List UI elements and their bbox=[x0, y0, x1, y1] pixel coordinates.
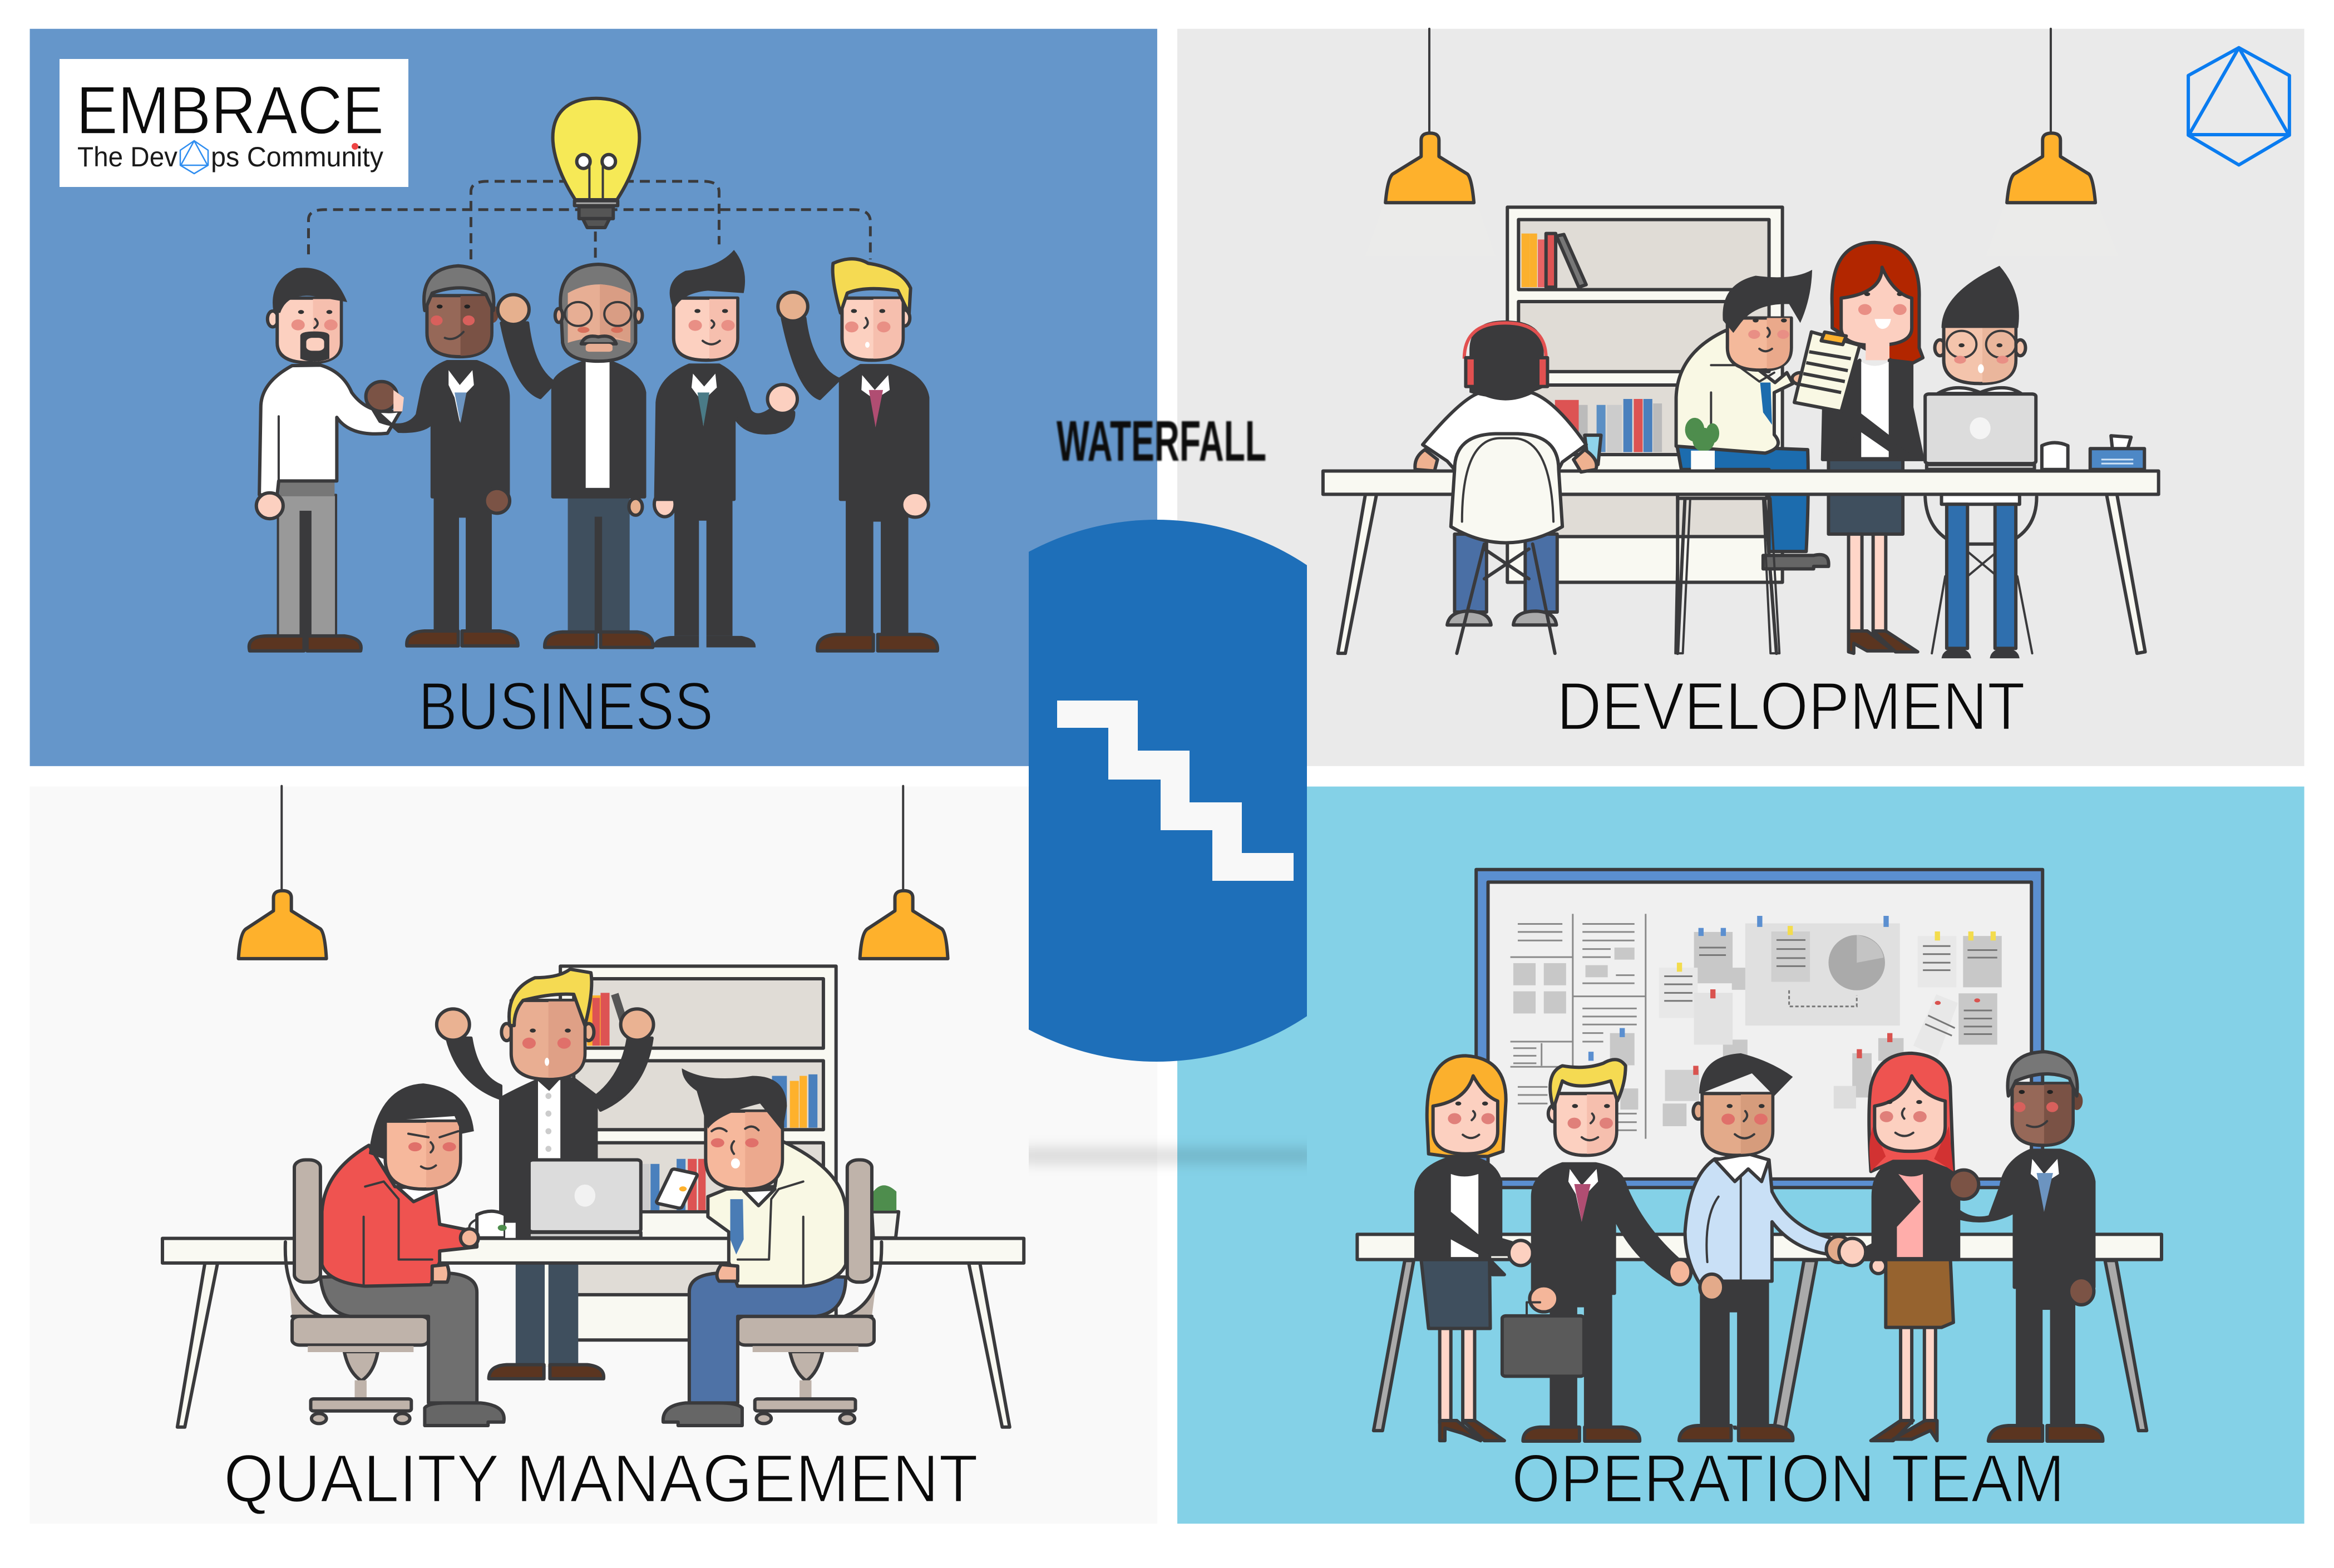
person: blonde woman in skirt bbox=[1416, 1056, 1533, 1441]
label: development: DEVELOPMENT bbox=[1557, 668, 2025, 744]
person: man in cream shirt with chair bbox=[656, 1068, 881, 1426]
label: operation team: OPERATION TEAM bbox=[1512, 1441, 2065, 1516]
icon: pendant lamp left bbox=[1365, 29, 1496, 256]
chart card bbox=[1745, 924, 1900, 1025]
plant: cactus bbox=[872, 1185, 899, 1238]
person: back view with headphones bbox=[1415, 320, 1597, 653]
icon: pendant lamp right bbox=[860, 786, 948, 959]
central waterfall badge bbox=[1029, 520, 1307, 1167]
icon: pendant lamp left bbox=[239, 786, 327, 959]
person: man with clipboard bbox=[1676, 270, 1829, 653]
laptop bbox=[529, 1160, 641, 1238]
panel: development bbox=[1177, 29, 2305, 766]
icon: inline logo hexagon bbox=[180, 141, 208, 174]
logo tagline end: ps Community bbox=[211, 141, 383, 172]
person: standing blond man with raised arms bbox=[437, 969, 654, 1379]
icon: white staircase bbox=[1057, 701, 1294, 881]
icon: pendant lamp right bbox=[1986, 29, 2119, 256]
whiteboard text columns bbox=[1511, 914, 1646, 1139]
person: white shirt man bbox=[249, 268, 401, 651]
label: quality management: QUALITY MANAGEMENT bbox=[224, 1441, 978, 1516]
paper notes bbox=[1659, 936, 1958, 1057]
person: red haired woman bbox=[1823, 243, 1923, 653]
label: business: BUSINESS bbox=[418, 668, 713, 744]
person: bearded man with glasses bbox=[498, 264, 653, 647]
desk bbox=[162, 1239, 1024, 1427]
bookshelf bbox=[1507, 207, 1783, 582]
logo tagline start: The Dev bbox=[77, 141, 177, 172]
mug bbox=[469, 1211, 516, 1238]
person: blond man in suit bbox=[778, 259, 937, 651]
person: man in red sweater with chair bbox=[285, 1083, 504, 1426]
tissue box bbox=[2090, 436, 2144, 470]
person: dark skinned man, handshake bbox=[1949, 1052, 2103, 1441]
person: man in light blue shirt bbox=[1679, 1053, 1852, 1441]
panel: business bbox=[30, 29, 1157, 766]
sticky notes bbox=[1513, 931, 2002, 1126]
icon: connecting dashed lines bbox=[308, 181, 870, 261]
desk bbox=[1357, 1234, 2162, 1431]
blue clipped circle bbox=[1029, 520, 1307, 1062]
person: red haired woman bbox=[1839, 1053, 1958, 1441]
document: clipboard bbox=[1794, 332, 1860, 411]
heading: waterfall: WATERFALL bbox=[1057, 409, 1266, 473]
panel: quality management bbox=[30, 786, 1157, 1523]
bookshelf bbox=[560, 966, 836, 1340]
desk bbox=[1323, 471, 2159, 653]
icon: red dot bbox=[352, 143, 358, 150]
laptop bbox=[1925, 394, 2036, 470]
mug bbox=[2042, 443, 2068, 470]
shadow under badge bbox=[1001, 1148, 1335, 1163]
glass of water bbox=[1585, 435, 1601, 465]
person: blond man with briefcase bbox=[1502, 1059, 1691, 1441]
person: black haired man in suit bbox=[653, 250, 797, 647]
whiteboard bbox=[1476, 870, 2042, 1187]
icon: light bulb bbox=[553, 98, 639, 228]
logo: embrace the devops community bbox=[60, 59, 408, 187]
plant: cactus bbox=[1685, 418, 1719, 470]
icon: hexagon logo bbox=[2188, 48, 2289, 165]
person: dark skinned man in suit, handshake bbox=[366, 266, 518, 646]
panel: operation team bbox=[1177, 787, 2305, 1523]
logo wordmark: EMBRACE bbox=[76, 72, 384, 148]
person: glasses developer bbox=[1925, 266, 2037, 658]
